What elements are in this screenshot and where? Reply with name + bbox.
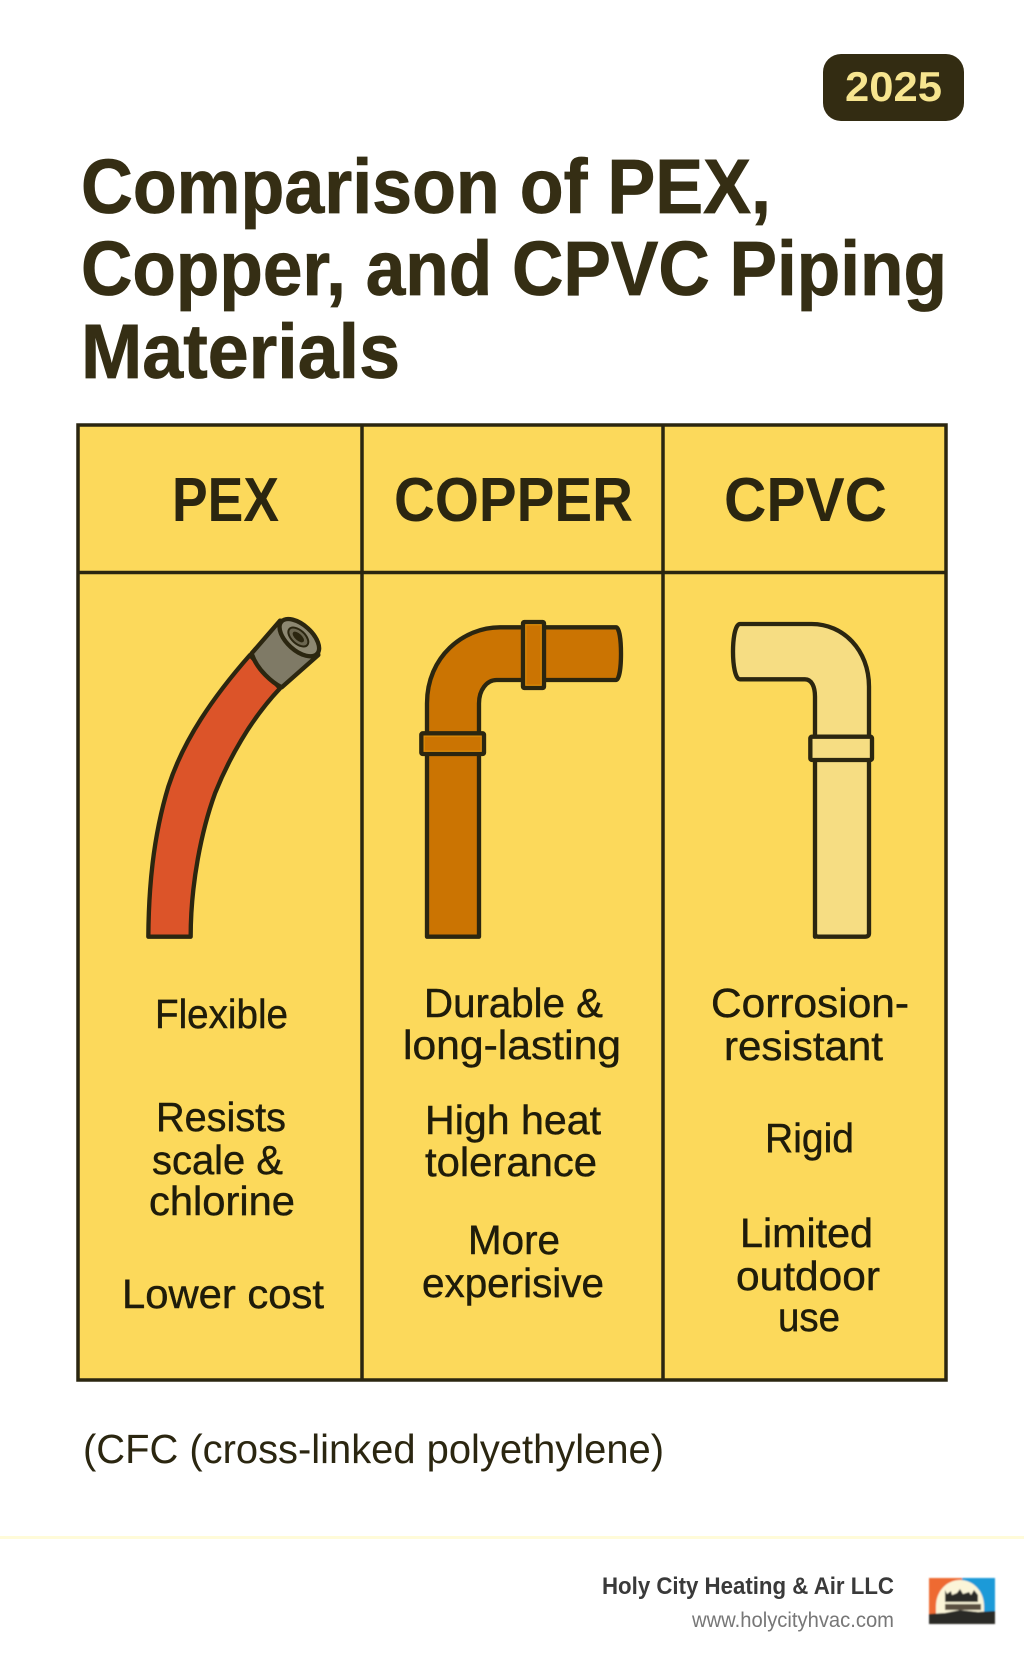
feature: Corrosion-resistant: resistant	[724, 1023, 884, 1069]
title	[81, 144, 947, 395]
feature: Resists scale and chlorine: chlorine	[149, 1178, 295, 1224]
icon: CPVC pipe	[733, 624, 872, 937]
feature: Limited outdoor use: outdoor	[736, 1253, 880, 1299]
feature: Resists scale and chlorine	[149, 1094, 295, 1224]
footnote: (CFC (cross-linked polyethylene)	[83, 1426, 664, 1472]
table grid lines	[78, 425, 946, 1380]
feature: Corrosion-resistant	[711, 980, 909, 1069]
feature: Flexible: Flexible	[155, 991, 288, 1037]
feature: More experisive: More	[468, 1217, 560, 1263]
feature: Resists scale and chlorine: scale &	[152, 1137, 283, 1183]
feature: Resists scale and chlorine: Resists	[156, 1094, 286, 1140]
icon: copper pipe	[421, 622, 621, 937]
title: Copper, and CPVC Piping	[81, 226, 947, 312]
footer website: www.holycityhvac.com	[691, 1609, 894, 1632]
year badge	[823, 54, 964, 121]
column: PEX	[122, 466, 326, 1317]
table background	[78, 425, 946, 1380]
footer company name: Holy City Heating & Air LLC	[602, 1573, 894, 1600]
column: CPVC	[711, 466, 909, 1340]
title: Comparison of PEX,	[81, 144, 771, 230]
feature: High heat tolerance: High heat	[425, 1097, 602, 1143]
feature: More experisive	[422, 1217, 604, 1306]
title: Materials	[81, 309, 400, 395]
header: PEX: PEX	[172, 466, 279, 535]
feature: Rigid: Rigid	[765, 1115, 854, 1161]
comparison table	[78, 425, 946, 1380]
feature: Durable and long-lasting	[403, 980, 621, 1068]
feature: Limited outdoor use: use	[778, 1294, 840, 1340]
feature: Durable and long-lasting: long-lasting	[403, 1022, 621, 1068]
feature: Limited outdoor use	[736, 1210, 880, 1340]
icon: company logo	[929, 1578, 995, 1624]
feature: High heat tolerance: tolerance	[425, 1139, 597, 1185]
feature: Corrosion-resistant: Corrosion-	[711, 980, 909, 1026]
year badge: 2025	[845, 63, 942, 110]
feature: Durable and long-lasting: Durable &	[424, 980, 603, 1026]
feature: Limited outdoor use: Limited	[740, 1210, 873, 1256]
header: COPPER: COPPER	[394, 466, 633, 535]
feature: Lower cost: Lower cost	[122, 1271, 325, 1317]
header: CPVC: CPVC	[724, 466, 887, 535]
feature: High heat tolerance	[425, 1097, 602, 1185]
icon: PEX pipe	[148, 612, 326, 937]
feature: More experisive: experisive	[422, 1260, 604, 1306]
footer divider	[0, 1536, 1024, 1539]
column: COPPER	[394, 466, 633, 1306]
